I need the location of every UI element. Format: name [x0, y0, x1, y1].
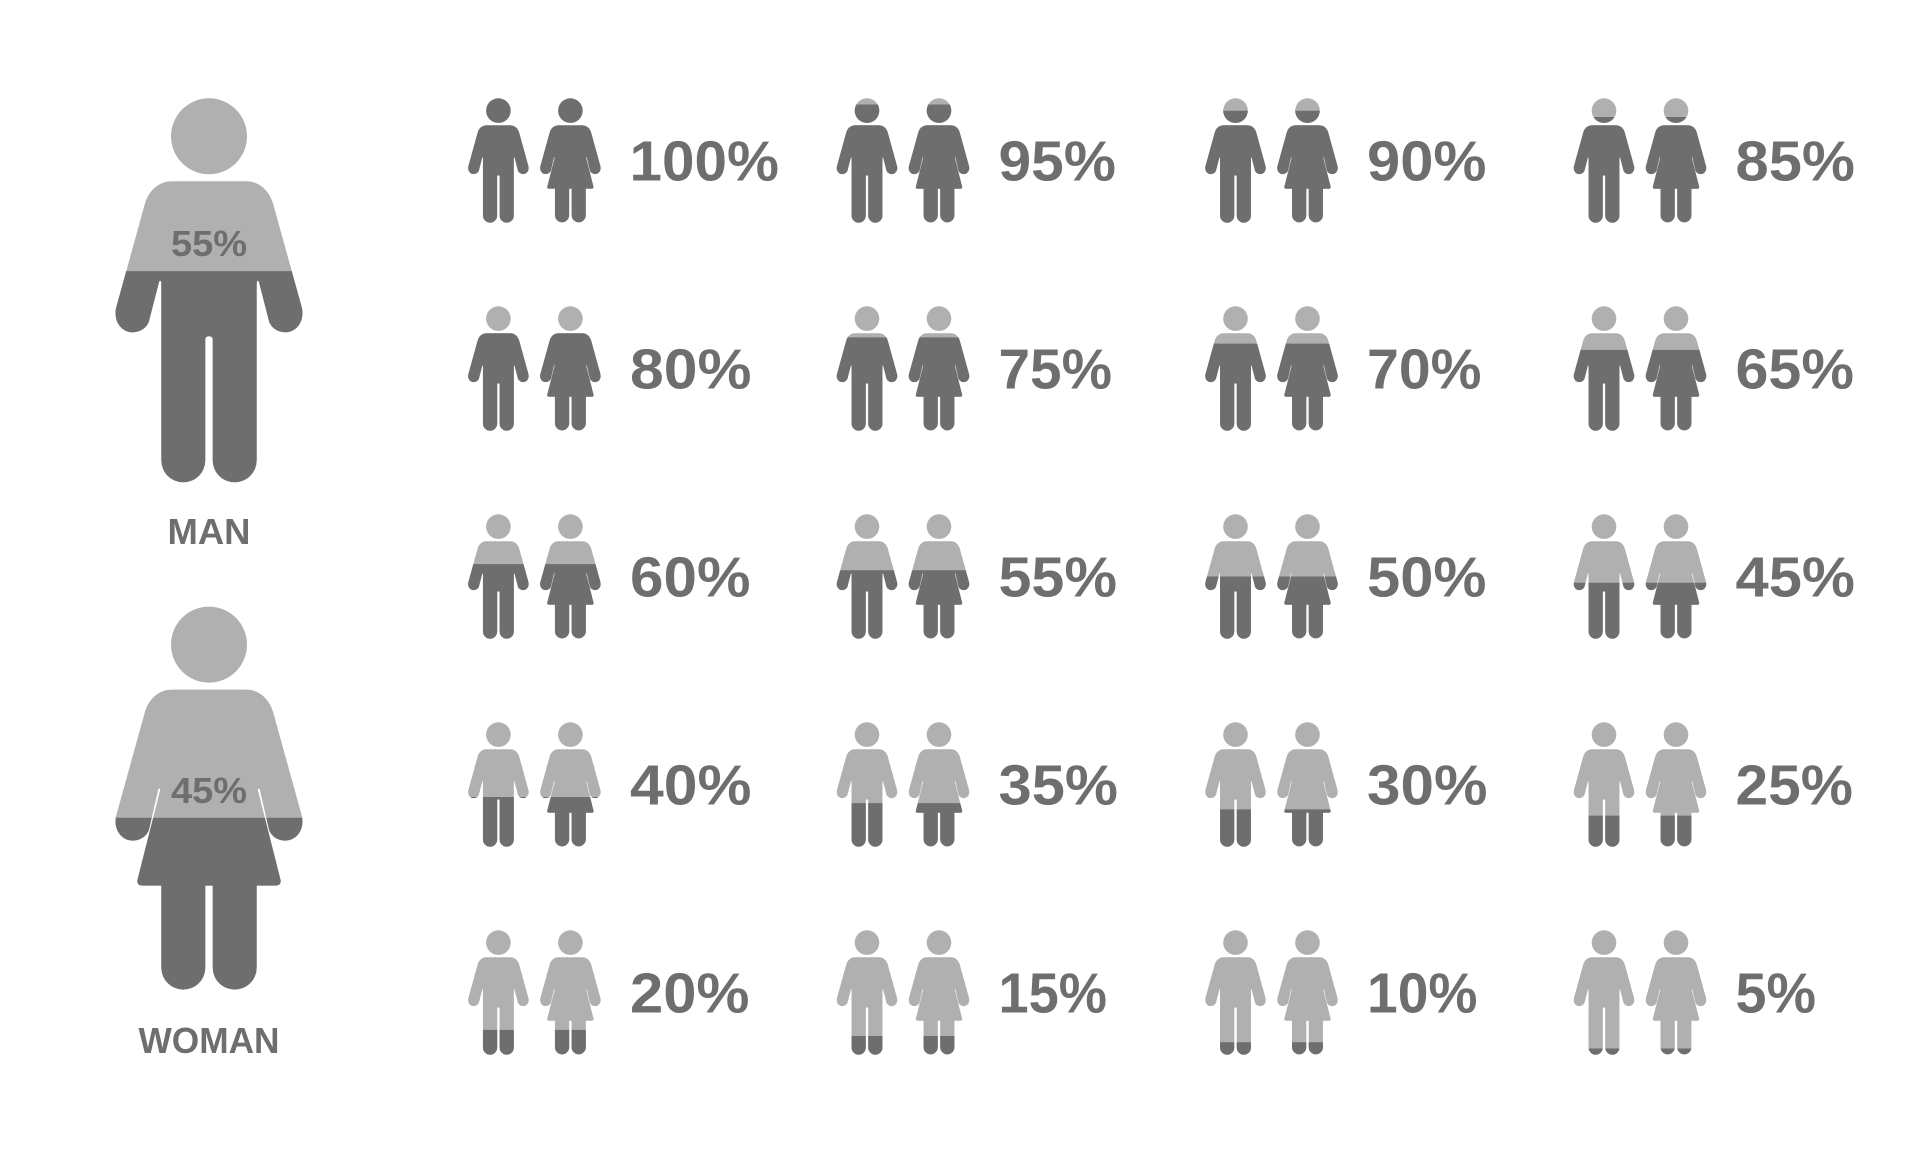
infographic canvas	[116, 98, 1854, 1055]
item: 100%	[468, 98, 779, 223]
item: 55%: 55%	[998, 546, 1117, 610]
man label: MAN	[168, 511, 250, 552]
item: 30%	[1205, 722, 1488, 847]
item: 50%: 50%	[1367, 546, 1486, 610]
item: 60%	[468, 514, 750, 639]
item: 15%	[837, 930, 1107, 1055]
item: 80%: 80%	[630, 338, 752, 402]
item: 90%	[1205, 98, 1486, 223]
item: 10%: 10%	[1367, 962, 1478, 1026]
item: 55%	[837, 514, 1117, 639]
item: 50%	[1205, 514, 1486, 639]
item: 30%: 30%	[1367, 754, 1488, 818]
panel: woman figure	[115, 607, 303, 1061]
item: 85%: 85%	[1736, 130, 1855, 194]
item: 90%: 90%	[1367, 130, 1486, 194]
item: 95%	[837, 98, 1116, 223]
item: 65%	[1574, 306, 1854, 431]
panel: man figure	[115, 98, 303, 552]
item: 85%	[1574, 98, 1855, 223]
item: 40%: 40%	[630, 754, 752, 818]
item: 5%	[1574, 930, 1816, 1055]
item: 20%	[468, 930, 750, 1055]
item: 25%: 25%	[1736, 754, 1853, 818]
item: 100%: 100%	[630, 130, 779, 194]
item: 65%: 65%	[1736, 338, 1854, 402]
item: 70%	[1205, 306, 1482, 431]
item: 75%: 75%	[998, 338, 1112, 402]
item: 5%: 5%	[1736, 962, 1816, 1026]
man percentage value: 55%	[171, 223, 247, 264]
item: 45%	[1574, 514, 1855, 639]
icon: large woman 45% filled	[115, 607, 303, 990]
item: 45%: 45%	[1736, 546, 1855, 610]
item: 95%: 95%	[998, 130, 1116, 194]
icon: large man 55% filled	[115, 98, 303, 482]
item: 70%: 70%	[1367, 338, 1482, 402]
item: 35%: 35%	[998, 754, 1118, 818]
item: 15%: 15%	[998, 962, 1107, 1026]
item: 40%	[468, 722, 752, 847]
item: 10%	[1205, 930, 1478, 1055]
item: 80%	[468, 306, 752, 431]
item: 35%	[837, 722, 1118, 847]
item: 20%: 20%	[630, 962, 750, 1026]
woman percentage value: 45%	[171, 770, 247, 811]
item: 75%	[837, 306, 1112, 431]
woman label: WOMAN	[138, 1020, 280, 1061]
item: 25%	[1574, 722, 1853, 847]
item: 60%: 60%	[630, 546, 750, 610]
